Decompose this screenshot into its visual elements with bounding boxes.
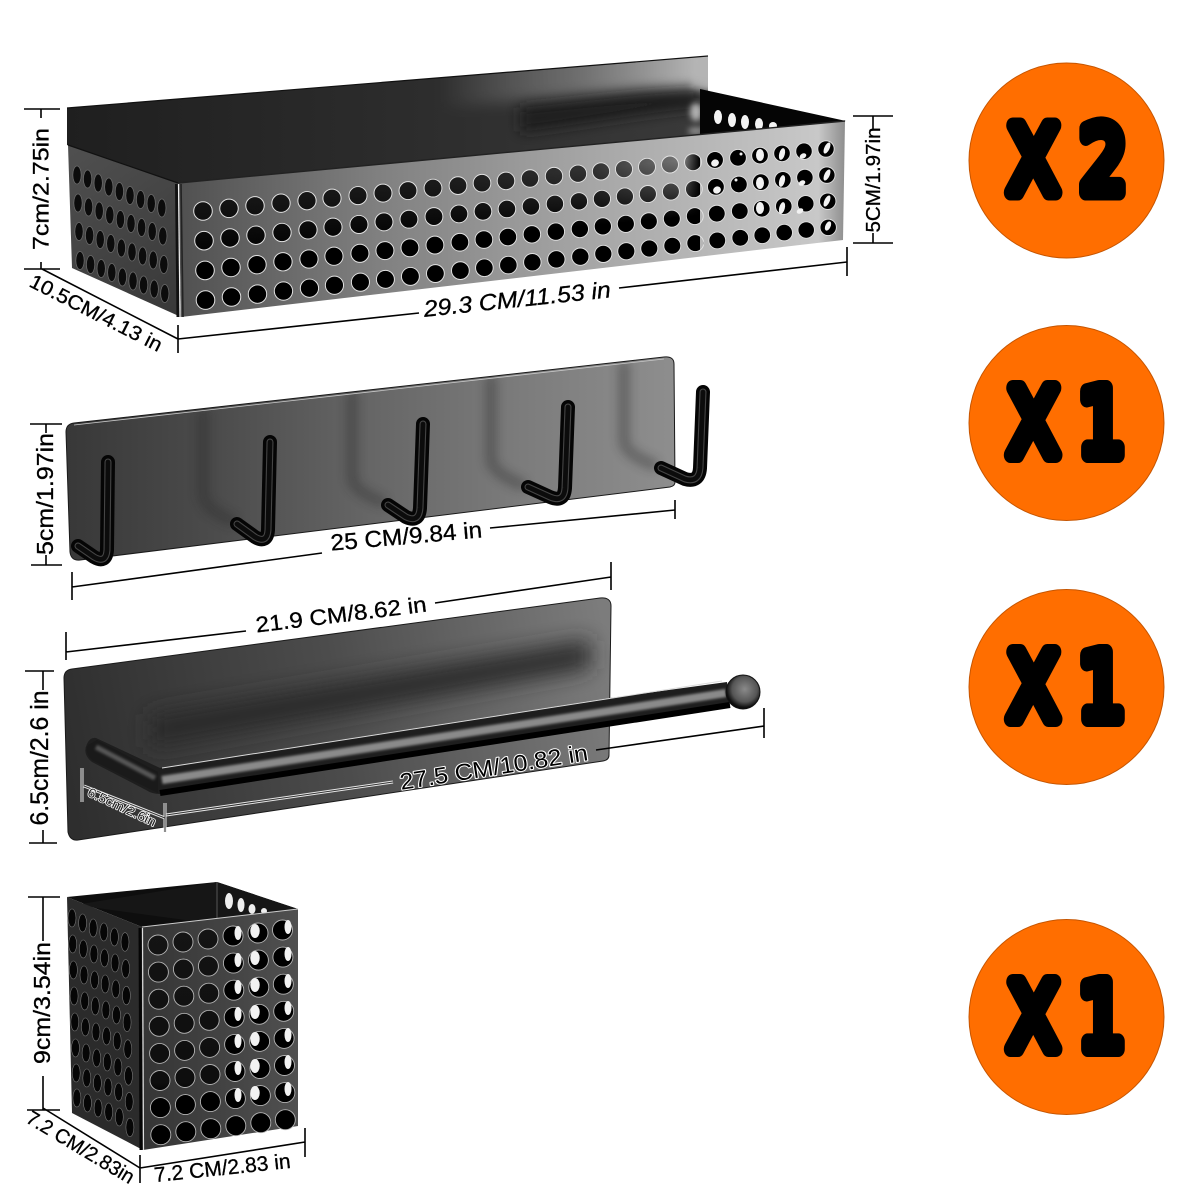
hook 1 — [78, 462, 108, 559]
towel rack dimension: height 6.5cm — [25, 671, 57, 843]
product: five-hook rail — [66, 357, 703, 560]
towel rack dimension: height 6.5cm: 6.5cm/2.6 in — [26, 690, 54, 826]
hook rail dimension: height 5cm: 5cm/1.97in — [32, 433, 58, 555]
quantity badge: cup x1 — [969, 920, 1164, 1114]
basket front perforated face — [175, 120, 846, 317]
product: wide perforated basket shelf — [67, 40, 848, 330]
basket inner right wall — [700, 89, 846, 136]
hook rail dimension: height 5cm — [30, 424, 62, 565]
towel rack back plate — [64, 598, 611, 840]
towel rack length dimension: 21.9cm — [66, 562, 611, 660]
hook 4 — [528, 407, 568, 499]
cup dimension: width 7.2cm: 7.2 CM/2.83 in — [153, 1150, 292, 1187]
towel rack depth dimension: 6.5cm — [82, 768, 165, 832]
cup left face — [67, 897, 143, 1150]
hook rail dimension: length 25cm: 25 CM/9.84 in — [329, 516, 483, 556]
hook 2 — [237, 442, 270, 539]
towel rack length dimension: 27.5cm: 27.5 CM/10.82 in — [398, 739, 590, 795]
towel rack end ball — [726, 675, 760, 709]
hook 3 — [388, 424, 423, 519]
basket dimension: height 7cm: 7cm/2.75in — [28, 128, 54, 250]
quantity badge: towel rack x1 — [969, 590, 1164, 784]
towel rack depth dimension: 6.5cm: 6.5cm/2.6in — [85, 784, 159, 829]
basket dimension: length 29.3cm: 29.3 CM/11.53 in — [421, 276, 612, 322]
towel rack rod — [85, 681, 730, 794]
cup front perforated face — [140, 905, 300, 1155]
quantity badge: towel rack x1: X1 — [1008, 634, 1125, 741]
basket back wall — [67, 55, 708, 182]
towel rack length dimension: 21.9cm: 21.9 CM/8.62 in — [254, 592, 428, 637]
towel rack length dimension: 27.5cm — [166, 708, 764, 815]
cup dimension: width 7.2cm — [140, 1128, 305, 1187]
hook rail back plate — [66, 357, 675, 560]
quantity badge: hook rail x1: X1 — [1008, 370, 1125, 477]
quantity badge: basket x2: X2 — [1008, 107, 1127, 215]
cup dimension: depth 7.2cm: 7.2 CM/2.83in — [22, 1107, 138, 1189]
basket dimension: length 29.3cm — [178, 247, 847, 339]
quantity badge: basket x2 — [969, 63, 1164, 258]
hook 5 — [661, 392, 703, 480]
basket dimension: side height 5cm: 5CM/1.97in — [863, 127, 885, 233]
basket dimension: height 7cm — [24, 109, 60, 269]
quantity badge: cup x1: X1 — [1008, 964, 1125, 1071]
basket left side face — [68, 145, 181, 317]
product: paper towel rack — [64, 598, 764, 840]
product: perforated utensil cup — [67, 882, 300, 1155]
basket dimension: depth 10.5cm: 10.5CM/4.13 in — [26, 271, 166, 357]
cup dimension: height 9cm — [27, 897, 60, 1110]
hook rail dimension: length 25cm — [72, 500, 675, 600]
cup dimension: height 9cm: 9cm/3.54in — [29, 942, 55, 1064]
quantity badge: hook rail x1 — [969, 326, 1164, 520]
basket dimension: side height 5cm — [853, 116, 893, 243]
cup interior — [67, 882, 298, 927]
